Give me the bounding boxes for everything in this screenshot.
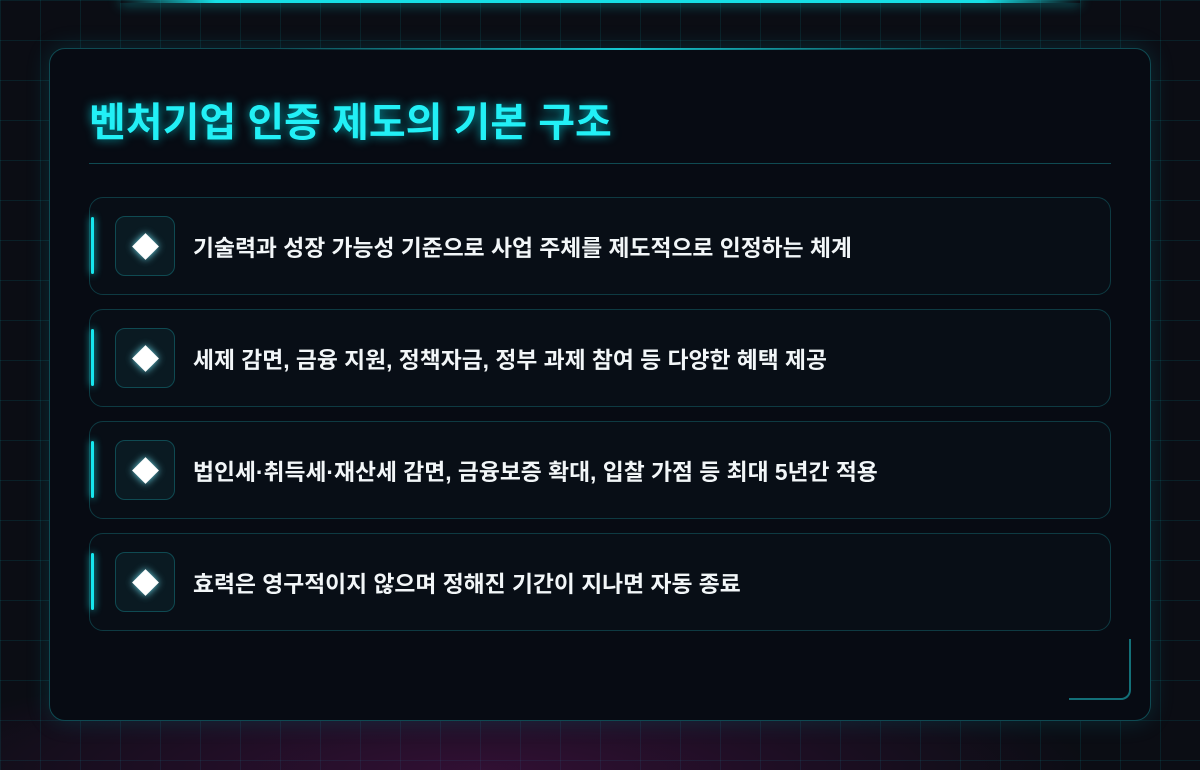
corner bracket	[1069, 639, 1131, 700]
title: 벤처기업 인증 제도의 기본 구조	[89, 101, 612, 145]
text 1: 기술력과 성장 가능성 기준으로 사업 주체를 제도적으로 인정하는 체계	[193, 235, 852, 261]
item 1	[89, 197, 1111, 295]
item 4	[89, 533, 1111, 631]
icon: diamond	[115, 552, 175, 612]
text 4: 효력은 영구적이지 않으며 정해진 기간이 지나면 자동 종료	[193, 571, 741, 597]
text 2: 세제 감면, 금융 지원, 정책자금, 정부 과제 참여 등 다양한 혜택 제공	[193, 347, 827, 373]
text 3: 법인세·취득세·재산세 감면, 금융보증 확대, 입찰 가점 등 최대 5년간 적용	[193, 459, 878, 485]
item 2	[89, 309, 1111, 407]
icon: diamond	[115, 328, 175, 388]
icon: diamond	[115, 216, 175, 276]
icon: diamond	[115, 440, 175, 500]
item 3	[89, 421, 1111, 519]
